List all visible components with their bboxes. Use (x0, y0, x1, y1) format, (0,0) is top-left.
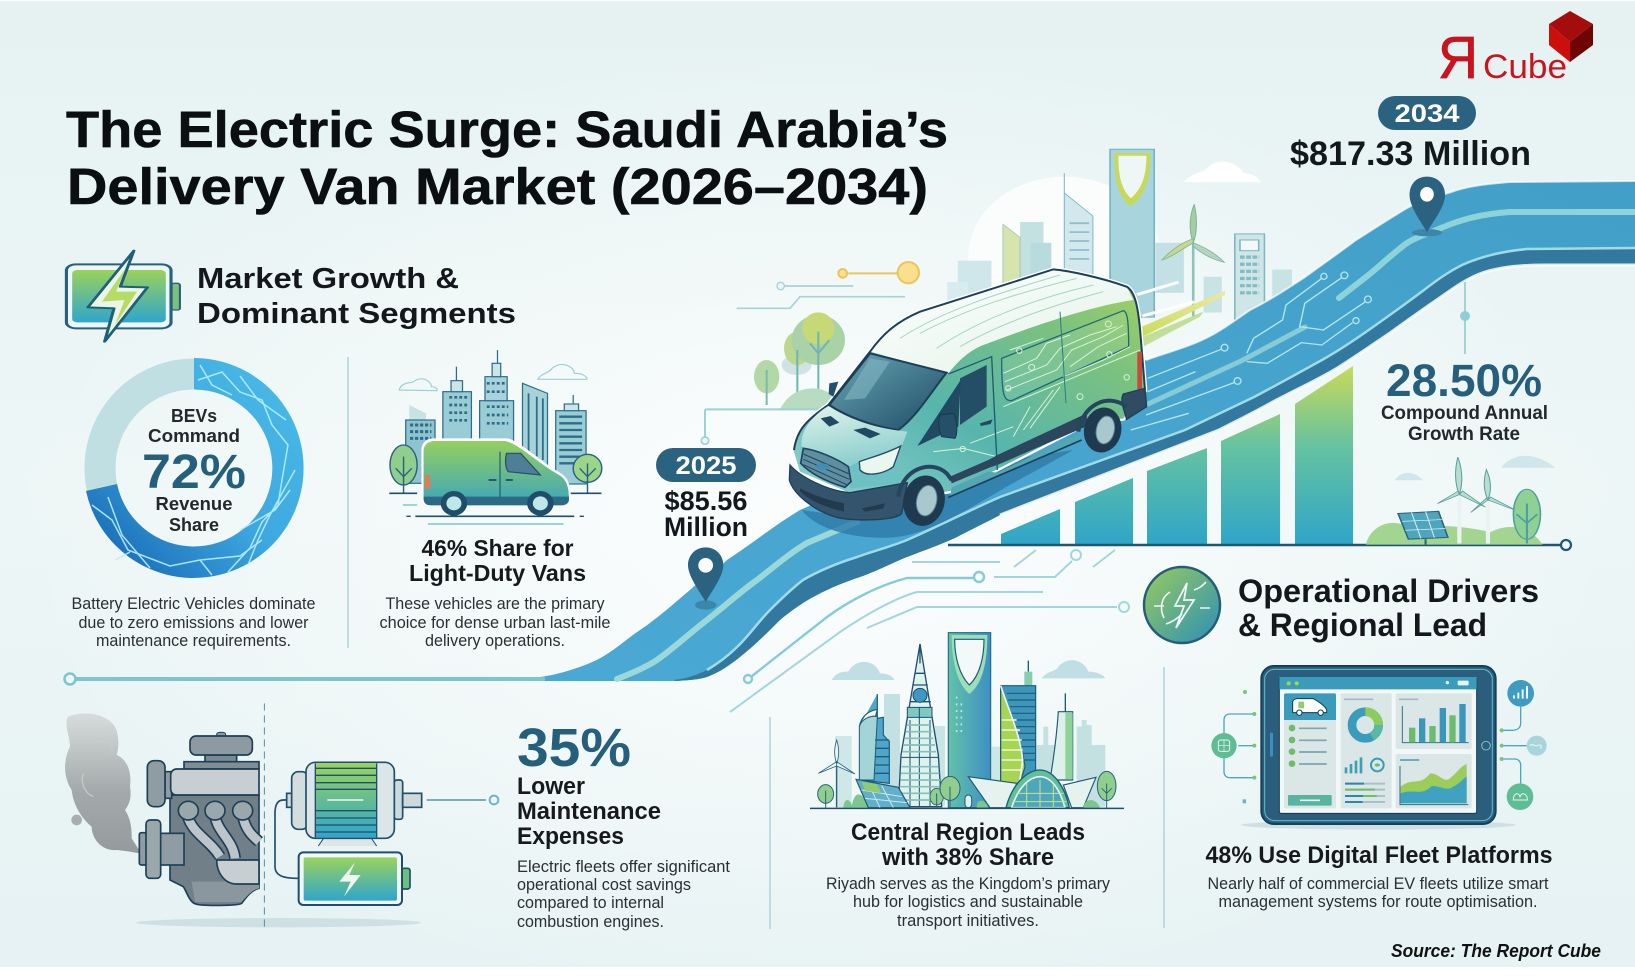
stat: 35% lower maintenance: Expenses (517, 823, 624, 850)
text: light-duty vans description: delivery operations. (425, 632, 565, 650)
icon: engine versus electric motor (65, 703, 498, 930)
donut chart: BEV revenue share: BEVs (171, 406, 217, 426)
section heading: operational drivers: Operational Drivers (1238, 573, 1539, 609)
icon: tablet with fleet dashboard (1211, 666, 1547, 830)
text: central region description: Riyadh serves as the Kingdom’s primary (826, 875, 1111, 893)
logo: RCube: Cube (1483, 48, 1567, 86)
text: maintenance description (517, 858, 730, 931)
road circuit traces (1131, 272, 1371, 430)
bar chart: growth (948, 366, 1571, 550)
donut chart: BEV revenue share (86, 358, 304, 578)
text: central region heading: with 38% Share (881, 844, 1054, 871)
panel: bar chart (1396, 693, 1472, 749)
section heading: market growth: Dominant Segments (197, 298, 516, 330)
circuit lines (730, 550, 1129, 712)
text: central region description: transport initiatives. (897, 912, 1039, 930)
text: light-duty vans heading: Light-Duty Vans (409, 560, 586, 586)
logo: RCube: Я (1438, 25, 1478, 91)
text: maintenance description: compared to internal (517, 894, 664, 912)
value: 2034 market size: $817.33 Million (1290, 135, 1531, 173)
hood (802, 406, 907, 467)
headlight (859, 446, 901, 474)
icon: wind turbines and solar (1366, 456, 1556, 545)
title: The Electric Surge: Saudi Arabia’s (66, 101, 948, 158)
stat: 35% lower maintenance (517, 718, 661, 850)
callout: CAGR: Growth Rate (1408, 424, 1520, 445)
text: BEV description: Battery Electric Vehicles dominate (72, 595, 316, 613)
door and windows (948, 357, 997, 470)
panel: vehicle list (1284, 693, 1336, 808)
text: light-duty vans heading: 46% Share for (422, 535, 574, 561)
tail and rear bumper (1137, 352, 1142, 389)
donut chart: BEV revenue share: Command (148, 426, 240, 446)
callout: CAGR: Compound Annual (1381, 403, 1548, 424)
title (66, 101, 948, 215)
lower skirt (950, 413, 1087, 483)
section heading: operational drivers (1144, 567, 1539, 643)
skyline behind the road (947, 149, 1292, 337)
text: central region description (826, 875, 1111, 930)
road centre stripe (1339, 212, 1635, 298)
electric motor (275, 762, 422, 905)
source credit: Source: The Report Cube (1391, 941, 1601, 961)
icon: 2034 location pin (1410, 177, 1445, 236)
stat: 35% lower maintenance: Maintenance (517, 798, 661, 825)
text: light-duty vans description (380, 595, 610, 650)
connected nodes (1224, 707, 1527, 783)
dashed divider (263, 703, 266, 930)
horizontal timeline line (64, 674, 545, 684)
grille (801, 448, 851, 487)
bumper (789, 465, 907, 520)
text: digital fleet description: management systems for route optimisation. (1218, 893, 1538, 911)
text: central region heading: Central Region Leads (851, 819, 1085, 846)
donut chart: BEV revenue share: 72% (142, 446, 246, 499)
donut chart: BEV revenue share: Share (169, 515, 219, 535)
side mirror (939, 413, 957, 438)
road: market growth curve (523, 181, 1635, 681)
icon: battery with bolt (66, 251, 180, 342)
stat: 35% lower maintenance: 35% (517, 718, 631, 778)
wheels (898, 467, 952, 497)
badge: 2034: 2034 (1394, 100, 1460, 128)
donut chart: BEV revenue share: Revenue (156, 494, 232, 514)
badge: 2034 (1378, 96, 1476, 130)
section heading: operational drivers: & Regional Lead (1238, 607, 1487, 643)
smoke (65, 713, 142, 854)
callout: CAGR: 28.50% (1386, 355, 1542, 406)
side panel and circuit art (1002, 311, 1129, 401)
text: light-duty vans description: These vehicles are the primary (386, 595, 605, 613)
text: maintenance description: combustion engines. (517, 913, 664, 931)
road dark lower band (673, 248, 1635, 681)
text: digital fleet description (1208, 875, 1549, 911)
text: maintenance description: operational cost savings (517, 876, 691, 894)
combustion engine (139, 732, 259, 905)
text: BEV description: due to zero emissions and lower (78, 614, 309, 632)
text: light-duty vans description: choice for dense urban last-mile (380, 614, 610, 632)
text: maintenance description: Electric fleets offer significant (517, 858, 730, 876)
decorative circuit and trees left of van (701, 262, 919, 444)
section heading: market growth (66, 251, 516, 342)
windshield (829, 353, 947, 430)
van shadow on road (802, 450, 1073, 538)
text: central region heading (851, 819, 1085, 871)
icon: operational bolt circle (1144, 567, 1220, 643)
text: digital fleet platforms heading: 48% Use Digital Fleet Platforms (1206, 842, 1552, 869)
badge: 2025: 2025 (676, 452, 737, 480)
text: digital fleet description: Nearly half of commercial EV fleets utilize smart (1208, 875, 1549, 893)
callout: CAGR (1381, 282, 1548, 445)
logo: RCube (1438, 11, 1593, 91)
section heading: market growth: Market Growth & (197, 263, 459, 295)
stat: 35% lower maintenance: Lower (517, 773, 585, 800)
delivery van illustration (789, 269, 1225, 530)
title: Delivery Van Market (2026–2034) (67, 158, 928, 215)
value: 2025 market size (664, 486, 748, 542)
value: 2025 market size: Million (664, 512, 748, 542)
badge: 2025 (656, 448, 756, 482)
value: 2025 market size: $85.56 (664, 486, 748, 516)
text: light-duty vans heading (409, 535, 586, 586)
icon: Riyadh skyline (810, 633, 1124, 808)
icon: 2025 location pin (688, 547, 723, 610)
panel: area chart (1396, 754, 1472, 808)
panel: donut and bars (1341, 693, 1392, 808)
text: BEV description: maintenance requirements. (96, 632, 291, 650)
text: BEV description (72, 595, 316, 650)
text: central region description: hub for logistics and sustainable (853, 893, 1083, 911)
icon: city with light-duty van (389, 350, 602, 524)
